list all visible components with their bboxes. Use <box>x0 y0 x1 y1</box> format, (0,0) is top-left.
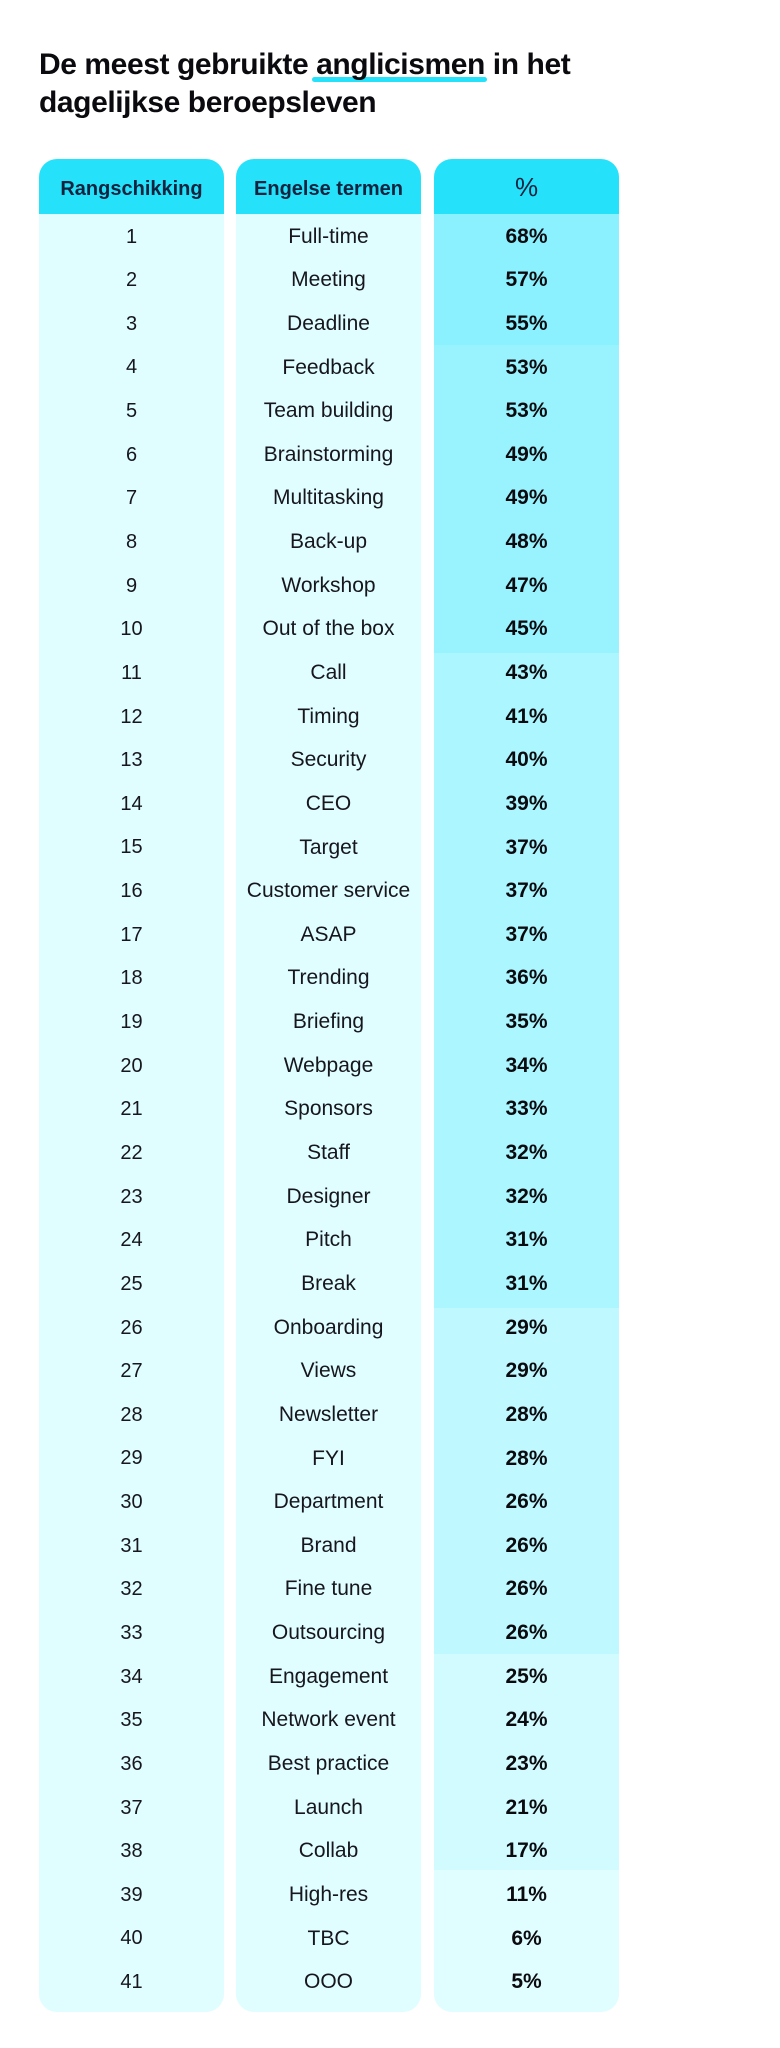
term values: Onboarding <box>274 1316 383 1339</box>
percent values: 24% <box>505 1708 548 1731</box>
term values: Call <box>310 661 347 684</box>
rank values: 19 <box>120 1011 143 1033</box>
rank values <box>120 226 143 1993</box>
panel: percentage column <box>434 159 619 2012</box>
term values: Collab <box>299 1839 358 1862</box>
percent header: % <box>515 172 538 202</box>
rank values: 2 <box>126 269 137 291</box>
term values: Sponsors <box>284 1097 373 1120</box>
term values: FYI <box>312 1447 345 1470</box>
percent values: 40% <box>505 748 548 771</box>
term values: Meeting <box>291 268 366 291</box>
rank values: 8 <box>126 531 137 553</box>
percent values: 21% <box>505 1796 548 1819</box>
rank header: Rangschikking <box>60 178 203 200</box>
colour band: ranks 26-33 <box>434 1308 619 1654</box>
term values: Staff <box>307 1141 350 1164</box>
term values: CEO <box>306 792 351 815</box>
rank header <box>39 159 224 214</box>
percent values: 26% <box>505 1621 548 1644</box>
percent values: 47% <box>505 574 548 597</box>
term values: Team building <box>264 399 393 422</box>
percent values: 41% <box>505 705 548 728</box>
rank values: 27 <box>120 1360 143 1382</box>
rank values: 24 <box>120 1229 143 1251</box>
percent values: 36% <box>505 966 548 989</box>
term values: Launch <box>294 1796 363 1819</box>
term values: Best practice <box>268 1752 389 1775</box>
rank values: 6 <box>126 444 137 466</box>
term values: Newsletter <box>279 1403 378 1426</box>
percent values: 32% <box>505 1185 548 1208</box>
percent values: 48% <box>505 530 548 553</box>
rank values: 7 <box>126 487 137 509</box>
colour band: ranks 11-25 <box>434 653 619 1308</box>
term values: Outsourcing <box>272 1621 385 1644</box>
term values: Engagement <box>269 1665 388 1688</box>
rank values: 13 <box>120 749 143 771</box>
term values: Full-time <box>288 225 369 248</box>
rank values: 4 <box>126 356 137 378</box>
rank values: 41 <box>120 1971 143 1993</box>
term values: Department <box>274 1490 383 1513</box>
colour band: ranks 1-3 <box>434 214 619 345</box>
term values: Security <box>291 748 366 771</box>
term values: Briefing <box>293 1010 364 1033</box>
rank values: 26 <box>120 1317 143 1339</box>
term values: Target <box>299 836 358 859</box>
term values: Deadline <box>287 312 370 335</box>
term values: Designer <box>286 1185 371 1208</box>
title text <box>39 48 570 119</box>
title text: De meest gebruikte anglicismen in het <box>39 48 570 81</box>
term values: Back-up <box>290 530 367 553</box>
term values: Trending <box>287 966 370 989</box>
term values: OOO <box>304 1970 353 1993</box>
percent values: 5% <box>511 1970 542 1993</box>
percent values: 31% <box>505 1228 548 1251</box>
rank values: 15 <box>120 836 143 858</box>
term values: High-res <box>289 1883 368 1906</box>
percent header <box>434 159 619 214</box>
percent values: 29% <box>505 1316 548 1339</box>
percent values <box>505 225 548 1993</box>
rank values: 10 <box>120 618 143 640</box>
term values: Brainstorming <box>264 443 393 466</box>
rank values: 39 <box>120 1884 143 1906</box>
term values: Brand <box>300 1534 357 1557</box>
percent values: 49% <box>505 486 548 509</box>
percent values: 26% <box>505 1577 548 1600</box>
percent values: 45% <box>505 617 548 640</box>
colour band: ranks 34-38 <box>434 1654 619 1870</box>
term values: Multitasking <box>273 486 384 509</box>
percent values: 35% <box>505 1010 548 1033</box>
rank values: 22 <box>120 1142 143 1164</box>
term values <box>247 225 410 1993</box>
rank values: 28 <box>120 1404 143 1426</box>
rank values: 21 <box>120 1098 143 1120</box>
percent values: 6% <box>511 1927 542 1950</box>
rank values: 34 <box>120 1666 143 1688</box>
rank values: 31 <box>120 1535 143 1557</box>
terms header <box>236 159 421 214</box>
rank values: 9 <box>126 575 137 597</box>
percent values: 23% <box>505 1752 548 1775</box>
term values: Network event <box>261 1708 396 1731</box>
terms header: Engelse termen <box>254 178 403 200</box>
percent values: 11% <box>506 1883 547 1906</box>
percent values: 29% <box>505 1359 548 1382</box>
percent values: 17% <box>505 1839 548 1862</box>
percent values: 25% <box>505 1665 548 1688</box>
rank values: 32 <box>120 1578 143 1600</box>
percent values: 53% <box>505 356 548 379</box>
rank values: 20 <box>120 1055 143 1077</box>
rank values: 3 <box>126 313 137 335</box>
percent values: 39% <box>505 792 548 815</box>
percent values: 32% <box>505 1141 548 1164</box>
rank values: 30 <box>120 1491 143 1513</box>
percent values: 33% <box>505 1097 548 1120</box>
percent values: 53% <box>505 399 548 422</box>
term values: Webpage <box>284 1054 373 1077</box>
term values: Workshop <box>281 574 376 597</box>
panel: rank column <box>39 159 224 2012</box>
rank values: 5 <box>126 400 137 422</box>
rank values: 38 <box>120 1840 143 1862</box>
percent values: 37% <box>505 879 548 902</box>
percent values: 37% <box>505 836 548 859</box>
percent values: 28% <box>505 1403 548 1426</box>
percent values: 57% <box>505 268 548 291</box>
title text: dagelijkse beroepsleven <box>39 86 376 119</box>
term values: Timing <box>297 705 360 728</box>
rank values: 37 <box>120 1797 143 1819</box>
term values: ASAP <box>300 923 357 946</box>
term values: TBC <box>308 1927 350 1950</box>
colour band: ranks 4-10 <box>434 345 619 653</box>
rank values: 16 <box>120 880 143 902</box>
panel: English terms column <box>236 159 421 2012</box>
rank values: 29 <box>120 1447 143 1469</box>
percent values: 26% <box>505 1490 548 1513</box>
title underline highlight <box>312 77 487 82</box>
rank values: 1 <box>126 226 137 248</box>
rank values: 40 <box>120 1927 143 1949</box>
rank values: 11 <box>121 662 142 684</box>
percent values: 68% <box>505 225 548 248</box>
term values: Feedback <box>282 356 375 379</box>
term values: Fine tune <box>285 1577 372 1600</box>
term values: Views <box>301 1359 356 1382</box>
rank values: 33 <box>120 1622 143 1644</box>
percent values: 37% <box>505 923 548 946</box>
term values: Pitch <box>305 1228 352 1251</box>
rank values: 18 <box>120 967 143 989</box>
term values: Customer service <box>247 879 410 902</box>
rank values: 14 <box>120 793 143 815</box>
title <box>39 48 570 119</box>
percent values: 28% <box>505 1447 548 1470</box>
rank values: 17 <box>120 924 143 946</box>
rank values: 23 <box>120 1186 143 1208</box>
rank values: 25 <box>120 1273 143 1295</box>
percent values: 34% <box>505 1054 548 1077</box>
percent values: 49% <box>505 443 548 466</box>
term values: Out of the box <box>263 617 394 640</box>
percent values: 31% <box>505 1272 548 1295</box>
rank values: 36 <box>120 1753 143 1775</box>
rank values: 12 <box>120 706 143 728</box>
percent values: 55% <box>505 312 548 335</box>
percent values: 26% <box>505 1534 548 1557</box>
percent values: 43% <box>505 661 548 684</box>
term values: Break <box>301 1272 356 1295</box>
rank values: 35 <box>120 1709 143 1731</box>
